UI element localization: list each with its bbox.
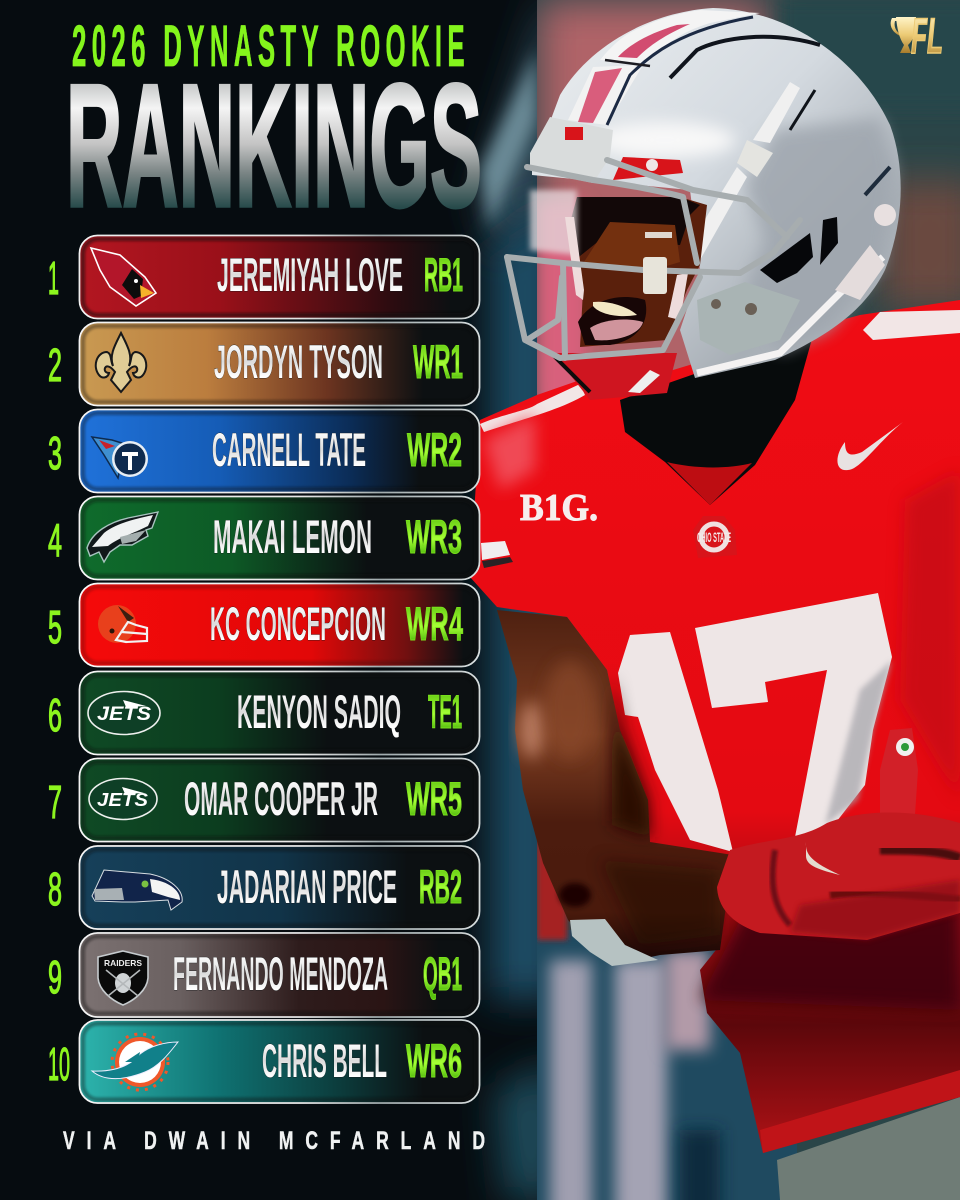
- team logo: jets: [88, 692, 160, 734]
- rank number: 4: [48, 514, 62, 566]
- row 6: [48, 672, 480, 754]
- jersey: [470, 300, 960, 1153]
- team logo: jets: JETS: [97, 704, 151, 725]
- team logo: raiders shield: RAIDERS: [104, 958, 142, 968]
- source credit: VIA DWAIN MCFARLAND: [63, 1127, 497, 1155]
- infographic canvas: 2026 DYNASTY ROOKIE: [72, 14, 470, 79]
- row 1: [48, 236, 480, 318]
- chin strap: [553, 353, 677, 400]
- row bar: [80, 933, 480, 1017]
- mouth: [578, 297, 646, 345]
- row 6: KENYON SADIQ: [237, 685, 401, 738]
- white strap: [680, 82, 800, 260]
- ohio state patch: [693, 516, 737, 558]
- row bar: [80, 672, 480, 754]
- front bumper: [530, 117, 683, 183]
- jaw panel: [697, 282, 800, 355]
- row 8: [48, 846, 480, 929]
- position: WR2: [407, 423, 462, 476]
- helmet: [532, 8, 901, 378]
- towel charm: [880, 728, 918, 830]
- team logo: seahawk: [92, 870, 182, 910]
- team logo: dolphin: [92, 1034, 178, 1090]
- row 9: [48, 933, 480, 1017]
- row 8: RB2: [419, 860, 462, 913]
- row 8: JADARIAN PRICE: [217, 860, 397, 913]
- row 2: WR1: [413, 335, 463, 388]
- position: WR4: [406, 597, 463, 650]
- position: WR6: [406, 1034, 462, 1087]
- position: WR5: [406, 772, 462, 825]
- row 9: QB1: [423, 947, 462, 1000]
- team logo: jets: [89, 778, 157, 820]
- row bar: [80, 496, 480, 580]
- team logo: titans: [92, 437, 148, 478]
- row 2: JORDYN TYSON: [214, 335, 383, 388]
- facemask: [507, 160, 800, 358]
- team logo: browns helmet: [98, 605, 147, 643]
- row 5: KC CONCEPCION: [210, 597, 386, 650]
- team logo: jets: JETS: [97, 790, 148, 810]
- row bar: [80, 322, 480, 406]
- glove: [717, 812, 960, 940]
- player photo illustration: OHIO STATE: [697, 529, 731, 545]
- rank number: 8: [48, 863, 62, 915]
- team logo: fleur-de-lis: [96, 333, 146, 392]
- row 10: [48, 1020, 480, 1103]
- row 6: TE1: [428, 685, 462, 738]
- team logo: eagle: [87, 512, 158, 562]
- row 4: MAKAI LEMON: [213, 510, 372, 563]
- rank number: 5: [48, 601, 62, 653]
- row 10: CHRIS BELL: [262, 1034, 387, 1087]
- rank number: 9: [48, 951, 62, 1003]
- photo background: [537, 0, 960, 1200]
- row 7: [48, 758, 480, 842]
- row 1: 1: [48, 252, 59, 304]
- left panel background: [462, 0, 537, 1200]
- rank number: 7: [48, 776, 62, 828]
- player photo illustration: [470, 8, 960, 1200]
- elbow tape: [570, 919, 658, 966]
- row 1: RB1: [424, 248, 463, 301]
- row 5: [48, 584, 480, 666]
- row 9: FERNANDO MENDOZA: [173, 947, 388, 1000]
- rank number: 6: [48, 689, 62, 741]
- helmet stripes: [568, 10, 820, 125]
- row 3: [48, 410, 480, 492]
- helmet vents: [760, 233, 813, 283]
- row bar: [80, 758, 480, 842]
- jersey number 17: [618, 593, 892, 852]
- position: WR3: [406, 510, 462, 563]
- team logo: cardinal: [91, 248, 156, 306]
- row bar: [80, 410, 480, 492]
- big ten logo: B1G.: [520, 487, 598, 529]
- brand logo: [891, 8, 943, 64]
- row bar: [80, 584, 480, 666]
- row 2: [48, 322, 480, 406]
- row 1: JEREMIYAH LOVE: [217, 248, 403, 301]
- rank number: 3: [48, 427, 62, 479]
- nike swoosh: [837, 422, 903, 470]
- arm: [497, 610, 733, 965]
- row 4: [48, 496, 480, 580]
- row bar: [80, 1020, 480, 1103]
- visor: [530, 190, 577, 255]
- team logo: raiders shield: [98, 951, 148, 1005]
- row bar: [80, 236, 480, 318]
- straps: [565, 217, 688, 320]
- neck shadow: [620, 328, 815, 505]
- row 7: OMAR COOPER JR: [184, 772, 378, 825]
- rank number: 2: [48, 339, 62, 391]
- nose clip: [643, 257, 667, 294]
- row 3: CARNELL TATE: [212, 423, 366, 476]
- row bar: [80, 846, 480, 929]
- pants: [777, 1097, 960, 1200]
- face: [568, 197, 707, 347]
- helmet shading: [745, 118, 895, 352]
- row 10: 10: [48, 1038, 70, 1090]
